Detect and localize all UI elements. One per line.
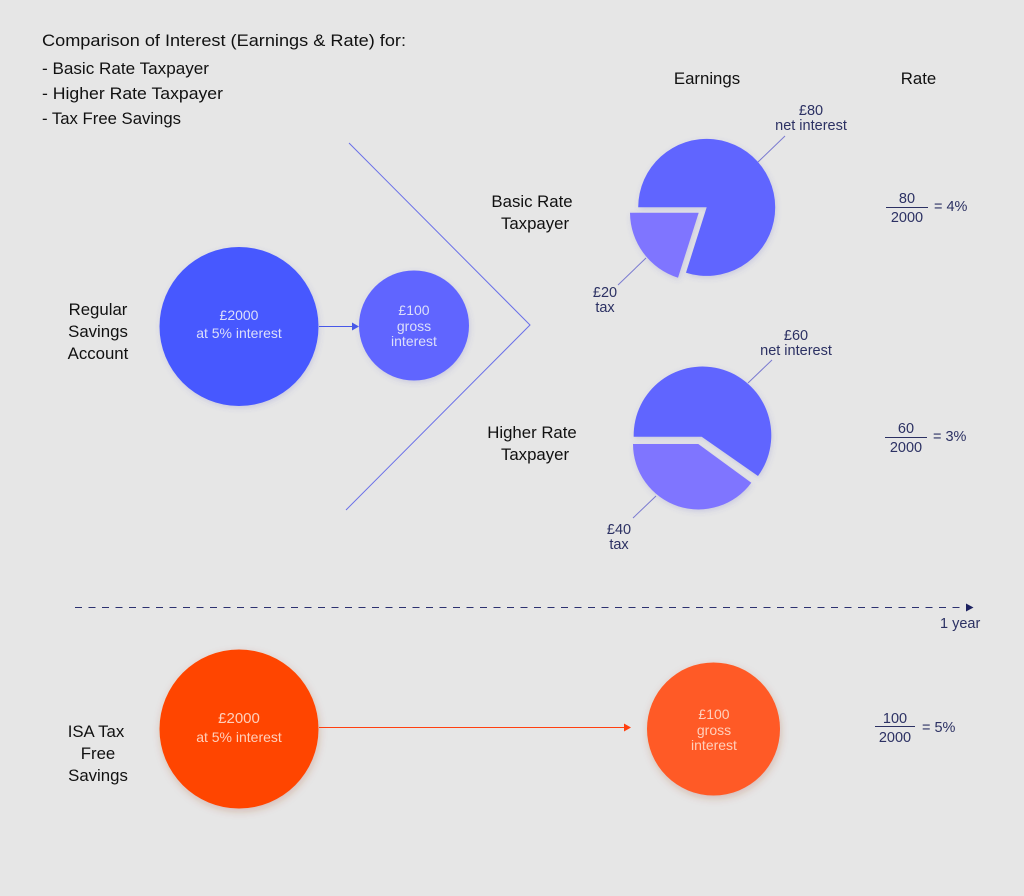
labels: basic pie net interest: £80 bbox=[799, 103, 823, 119]
slice: tax bbox=[633, 444, 751, 509]
circle: ISA 2000 at 5 percent bbox=[160, 650, 318, 808]
slice: net interest bbox=[638, 139, 775, 276]
title bbox=[42, 31, 406, 128]
circle: 100 gross interest: interest bbox=[391, 333, 437, 349]
arrow: ISA savings to gross interest bbox=[319, 724, 631, 732]
label: ISA tax free savings: Free bbox=[81, 744, 115, 763]
label: regular savings account bbox=[68, 300, 129, 363]
title: - Basic Rate Taxpayer bbox=[42, 59, 209, 78]
labels: higher pie tax bbox=[607, 522, 631, 553]
pie: higher rate bbox=[633, 360, 772, 518]
rate: ISA bbox=[875, 711, 956, 746]
labels: higher pie tax: tax bbox=[609, 537, 629, 553]
labels: basic pie net interest: net interest bbox=[775, 118, 847, 134]
column heading: earnings: Earnings bbox=[674, 69, 740, 88]
circle: ISA 2000 at 5 percent: at 5% interest bbox=[196, 729, 282, 745]
circle: ISA 100 gross interest: gross bbox=[697, 722, 731, 738]
circle: ISA 100 gross interest: £100 bbox=[698, 706, 730, 722]
slice: net interest bbox=[634, 367, 771, 476]
title: Comparison of Interest (Earnings & Rate) for: bbox=[42, 31, 406, 50]
chevron split lines bbox=[346, 143, 530, 510]
label: higher rate taxpayer: Taxpayer bbox=[501, 445, 569, 464]
arrow: savings to gross interest bbox=[319, 322, 359, 330]
labels: basic pie tax: tax bbox=[595, 300, 615, 316]
rate: ISA: 2000 bbox=[879, 730, 911, 746]
circle: ISA 100 gross interest: interest bbox=[691, 737, 737, 753]
circle: 2000 at 5 percent bbox=[160, 247, 318, 406]
circle: 100 gross interest: £100 bbox=[398, 302, 430, 318]
timeline arrow: 1 year bbox=[75, 604, 980, 632]
labels: basic pie net interest bbox=[775, 103, 847, 134]
pie: basic rate bbox=[618, 136, 785, 285]
rate: ISA: = 5% bbox=[922, 720, 956, 736]
circle: 2000 at 5 percent: £2000 bbox=[220, 307, 259, 323]
labels: basic pie tax bbox=[593, 285, 617, 316]
label: higher rate taxpayer: Higher Rate bbox=[487, 423, 577, 442]
labels: higher pie tax: £40 bbox=[607, 522, 631, 538]
timeline arrow: 1 year: 1 year bbox=[940, 616, 980, 632]
circle: 100 gross interest bbox=[359, 270, 469, 380]
labels: higher pie net interest bbox=[760, 328, 832, 359]
label: regular savings account: Account bbox=[68, 344, 129, 363]
rate: basic: 2000 bbox=[891, 210, 923, 226]
labels: higher pie net interest: £60 bbox=[784, 328, 808, 344]
rate: basic: 80 bbox=[899, 191, 915, 207]
label: basic rate taxpayer bbox=[491, 192, 573, 233]
label: regular savings account: Savings bbox=[68, 322, 128, 341]
title: - Higher Rate Taxpayer bbox=[42, 84, 223, 103]
label: basic rate taxpayer: Basic Rate bbox=[491, 192, 573, 211]
rate: higher: 60 bbox=[898, 421, 914, 437]
rate: higher: = 3% bbox=[933, 429, 967, 445]
label: ISA tax free savings: Savings bbox=[68, 766, 128, 785]
circle: ISA 100 gross interest bbox=[647, 662, 780, 796]
label: ISA tax free savings bbox=[68, 722, 128, 785]
label: basic rate taxpayer: Taxpayer bbox=[501, 214, 569, 233]
label: higher rate taxpayer bbox=[487, 423, 577, 464]
rate: higher: 2000 bbox=[890, 440, 922, 456]
circle: 2000 at 5 percent: at 5% interest bbox=[196, 325, 282, 341]
labels: basic pie tax: £20 bbox=[593, 285, 617, 301]
label: regular savings account: Regular bbox=[69, 300, 128, 319]
circle: ISA 2000 at 5 percent: £2000 bbox=[218, 710, 260, 727]
rate: higher bbox=[885, 421, 967, 456]
label: ISA tax free savings: ISA Tax bbox=[68, 722, 125, 741]
rate: basic bbox=[886, 191, 968, 226]
circle: 100 gross interest: gross bbox=[397, 318, 431, 334]
rate: ISA: 100 bbox=[883, 711, 907, 727]
rate: basic: = 4% bbox=[934, 199, 968, 215]
title: - Tax Free Savings bbox=[42, 109, 181, 128]
labels: higher pie net interest: net interest bbox=[760, 343, 832, 359]
column heading: rate: Rate bbox=[901, 69, 936, 88]
slice: tax bbox=[630, 213, 699, 278]
